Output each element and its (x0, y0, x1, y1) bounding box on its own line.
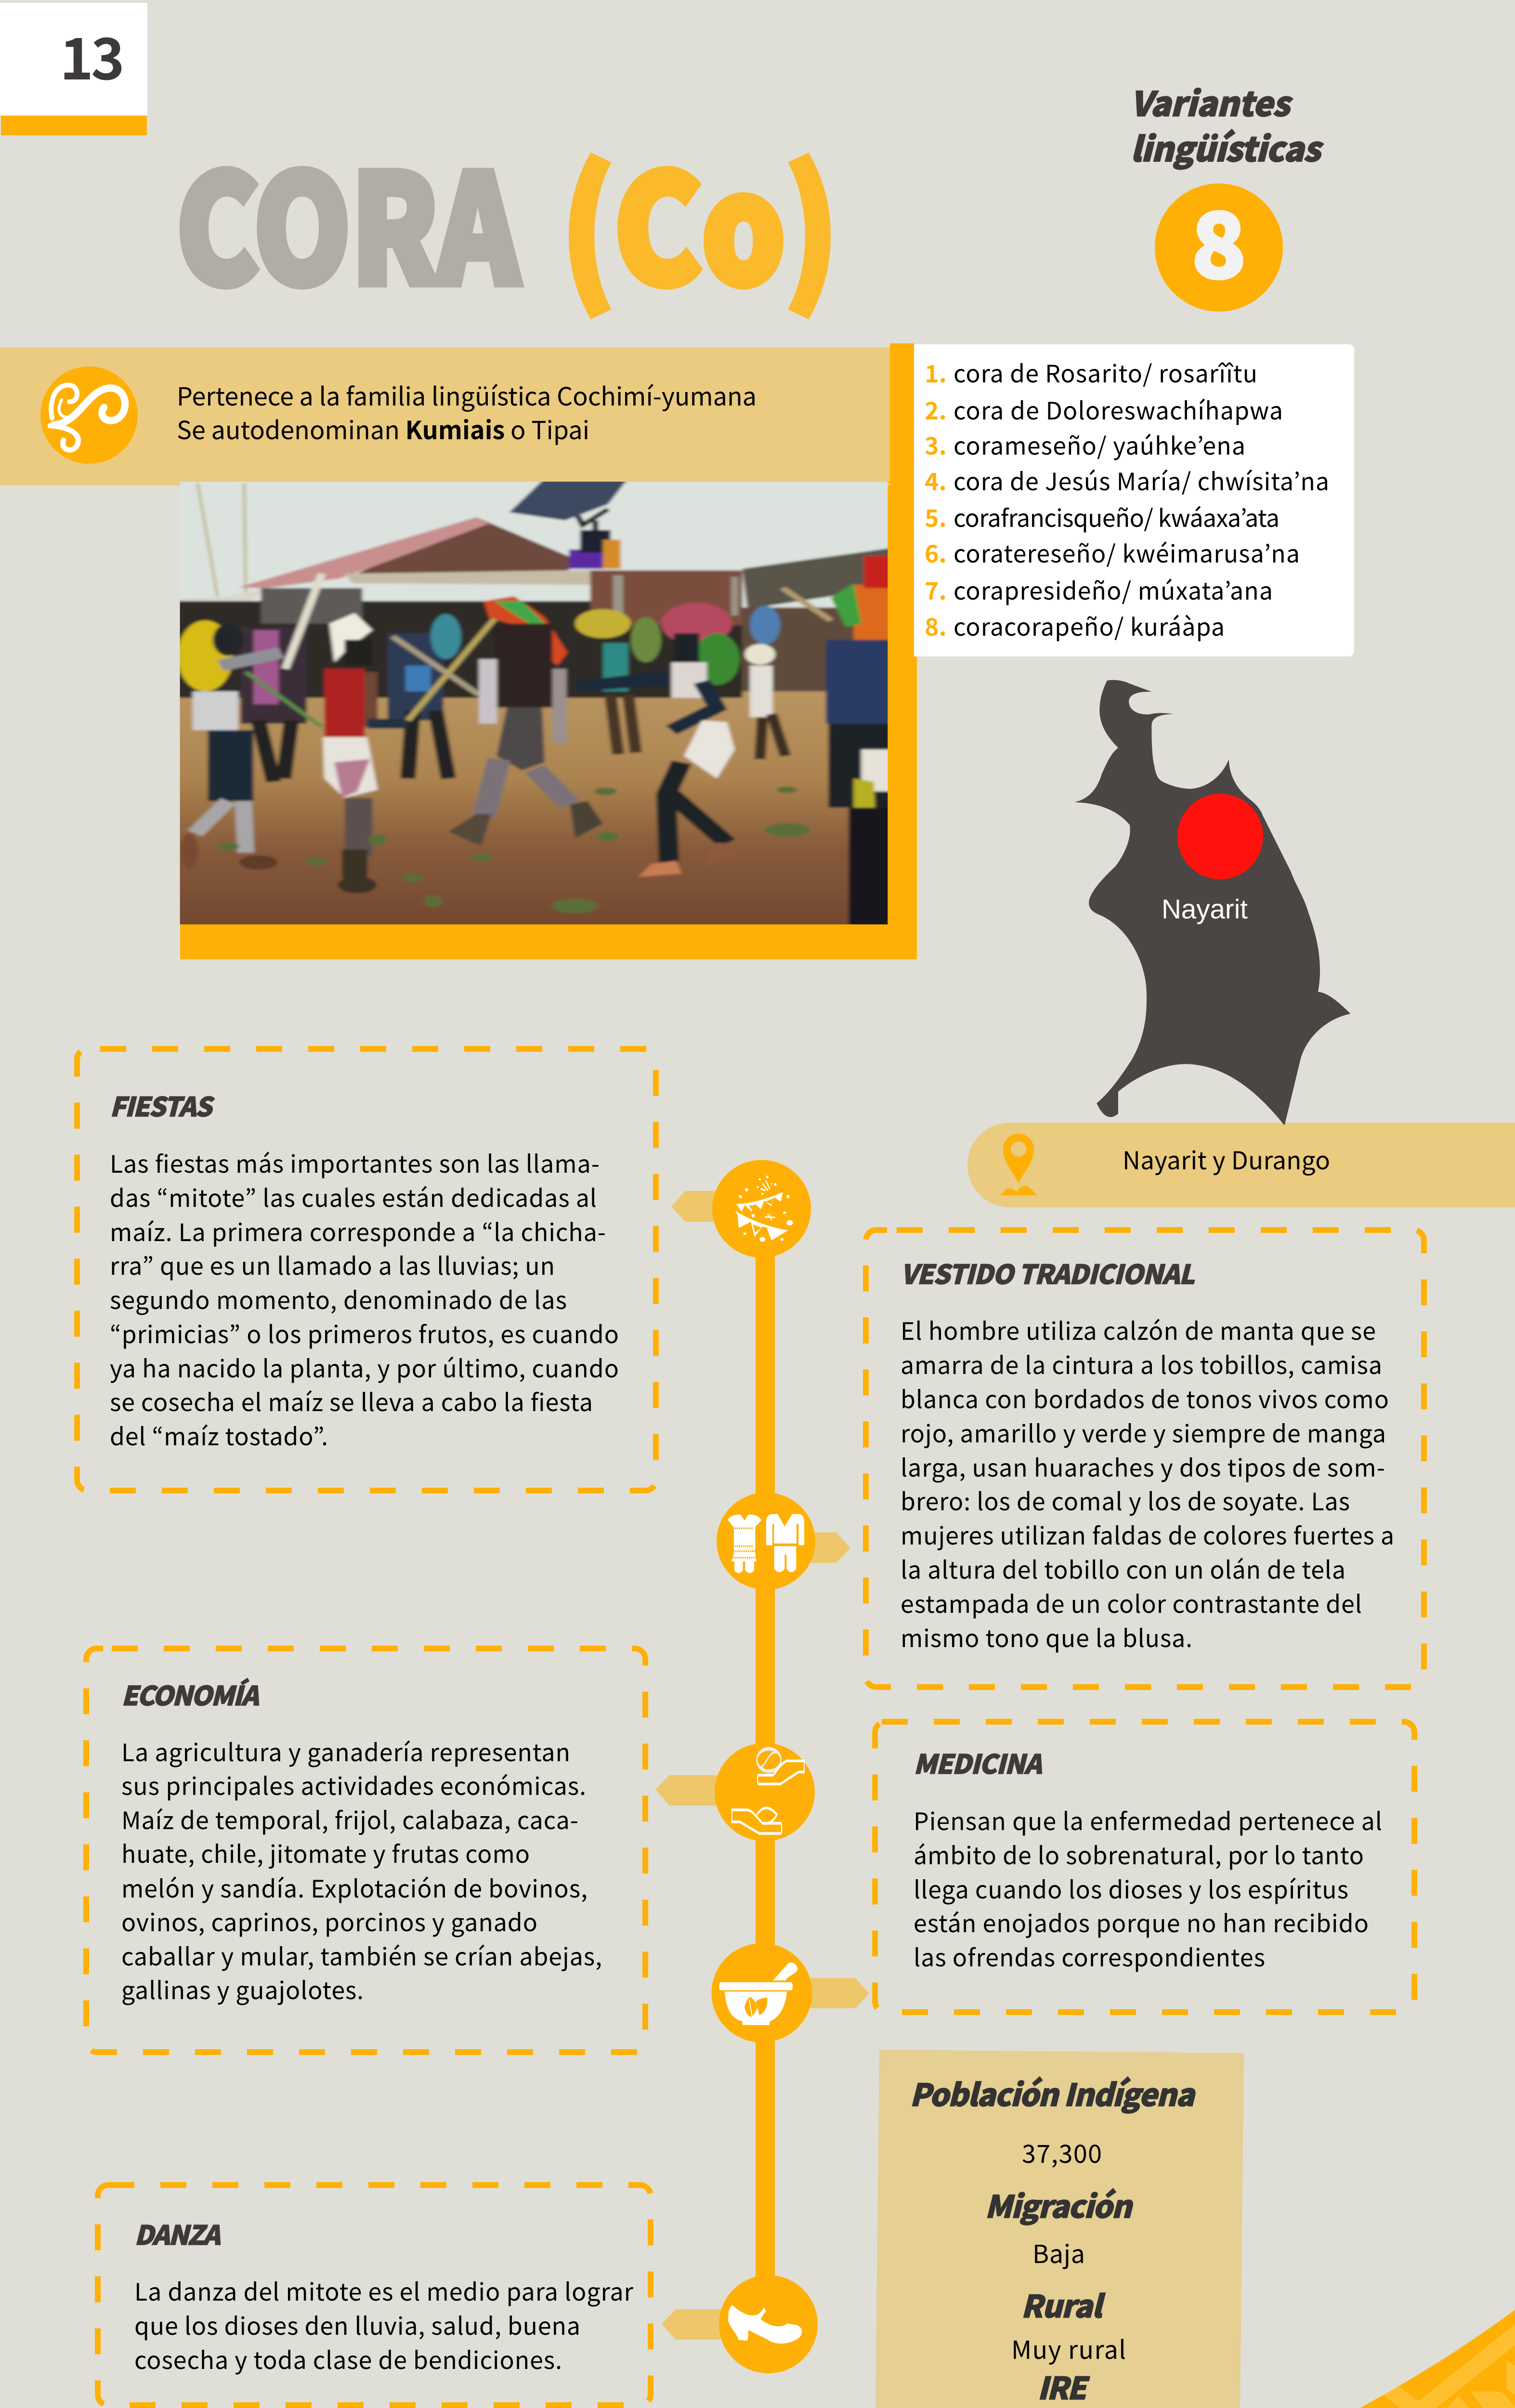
variant 4: cora de Jesús María/ chwísita’na (953, 463, 1329, 497)
body text: las ofrendas correspondientes (914, 1939, 1265, 1974)
body text: La agricultura y ganadería representan (121, 1734, 570, 1768)
variant 6: 6. (925, 535, 947, 570)
node: medicina icon (712, 1943, 812, 2042)
variants count badge (1155, 173, 1283, 312)
grass tufts (217, 786, 810, 913)
rural (1011, 2282, 1126, 2366)
footer woven pattern (6, 2310, 1515, 2408)
body text: mujeres utilizan faldas de colores fuertes a (901, 1517, 1394, 1552)
variant 4: 4. (925, 463, 947, 497)
panel: población (875, 2050, 1244, 2408)
page number tab (0, 3, 147, 135)
body text: das “mitote” las cuales están dedicadas al (110, 1179, 597, 1214)
body text: Las fiestas más importantes son las llama- (110, 1145, 600, 1180)
migración: Baja (1032, 2234, 1085, 2270)
title: CORA (176, 109, 521, 327)
dancer 4 (661, 602, 732, 644)
body text: llega cuando los dioses y los espíritus (914, 1871, 1348, 1906)
dish (509, 478, 628, 520)
body text (110, 1145, 619, 1453)
node: danza icon (719, 2275, 818, 2373)
body text: que los dioses den lluvia, salud, buena (134, 2307, 580, 2342)
poles (197, 483, 246, 614)
arrow: economía (655, 1775, 722, 1806)
body text: brero: los de comal y los de soyate. Las (901, 1483, 1350, 1518)
house (357, 517, 569, 574)
body text: larga, usan huaraches y dos tipos de som- (901, 1449, 1385, 1484)
roof figures (569, 550, 604, 569)
ground (165, 692, 904, 937)
body text: caballar y mular, también se crían abejas, (121, 1938, 602, 1973)
rural: Muy rural (1011, 2330, 1126, 2366)
dancer 2 (329, 613, 372, 662)
body text: gallinas y guajolotes. (121, 1972, 364, 2006)
page number tab: 13 (60, 13, 125, 96)
body text: La danza del mitote es el medio para lograr (134, 2273, 634, 2308)
title: (Co) (562, 109, 838, 327)
location marker (1177, 794, 1263, 879)
migración: Migración (985, 2183, 1134, 2227)
photo: danza del mitote (165, 472, 904, 937)
body text (914, 1803, 1382, 1974)
arrow: medicina (804, 1978, 869, 2008)
variants list panel (914, 344, 1354, 656)
heading: FIESTAS (110, 1086, 215, 1124)
heading: MEDICINA (914, 1743, 1042, 1781)
rural: Rural (1021, 2282, 1106, 2327)
location text: Nayarit y Durango (1123, 1141, 1330, 1177)
body text: segundo momento, denominado de las (110, 1282, 567, 1316)
variant 5: corafrancisqueño/ kwáaxa’ata (953, 499, 1280, 534)
body text: rojo, amarillo y verde y siempre de manga (901, 1415, 1386, 1450)
body text: estampada de un color contrastante del (901, 1585, 1362, 1620)
body text: la altura del tobillo con un olán de tela (901, 1551, 1345, 1586)
background dancers (603, 643, 628, 692)
body text (121, 1734, 602, 2006)
body text: huate, chile, jitomate y frutas como (121, 1835, 530, 1870)
población indígena (910, 2071, 1196, 2170)
body text: ámbito de lo sobrenatural, por lo tanto (914, 1837, 1364, 1871)
node: vestido icon (717, 1492, 815, 1590)
body text: sus principales actividades económicas. (121, 1767, 586, 1802)
body text: amarra de la cintura a los tobillos, camisa (901, 1347, 1382, 1381)
variant 7: 7. (925, 572, 947, 607)
body text: están enojados porque no han recibido (914, 1905, 1369, 1939)
variant 3: corameseño/ yaúhke’ena (953, 427, 1245, 462)
body text: blanca con bordados de tonos vivos como (901, 1381, 1389, 1415)
heading: DANZA (134, 2214, 221, 2252)
variant 7: corapresideño/ múxata’ana (953, 572, 1273, 607)
body text: ya ha nacido la planta, y por último, cuando (110, 1350, 619, 1385)
body text: Maíz de temporal, frijol, calabaza, caca- (121, 1802, 578, 1836)
variants heading: lingüísticas (1130, 123, 1324, 171)
photo frame (180, 343, 917, 959)
body text: se cosecha el maíz se lleva a cabo la fiesta (110, 1384, 593, 1418)
variants heading (1130, 78, 1324, 171)
family text: Se autodenominan Kumiais o Tipai (177, 410, 589, 446)
heading: VESTIDO TRADICIONAL (901, 1253, 1195, 1292)
variants heading: Variantes (1130, 78, 1293, 126)
panel: danza (98, 2185, 651, 2405)
body text: mismo tono que la blusa. (901, 1620, 1192, 1654)
variant 5: 5. (925, 499, 947, 534)
map label: Nayarit (1162, 894, 1248, 924)
icon: swirl (40, 366, 138, 464)
language family band (0, 347, 890, 485)
body text: rra” que es un llamado a las lluvias; un (110, 1247, 555, 1282)
arrow: vestido (804, 1532, 850, 1563)
variants count badge: 8 (1191, 173, 1246, 304)
arrow: danza (662, 2309, 727, 2340)
variant 8: coracorapeño/ kuráàpa (953, 608, 1225, 643)
timeline spine (756, 1209, 775, 2324)
variant 2: 2. (925, 392, 947, 427)
body text: maíz. La primera corresponde a “la chicha- (110, 1214, 606, 1248)
family text (177, 377, 757, 446)
body text: melón y sandía. Explotación de bovinos, (121, 1870, 588, 1905)
variant 6: coratereseño/ kwéimarusa’na (953, 535, 1300, 570)
sky (180, 482, 888, 610)
panel: medicina (875, 1722, 1414, 2012)
dancer right (854, 585, 904, 692)
body text: Piensan que la enfermedad pertenece al (914, 1803, 1382, 1837)
población indígena: Población Indígena (910, 2071, 1196, 2115)
dancer 1 (177, 620, 233, 692)
node: fiestas icon (712, 1160, 811, 1258)
back crowd (241, 627, 307, 724)
body text (134, 2273, 634, 2376)
población indígena: 37,300 (1022, 2134, 1102, 2170)
variant 2: cora de Doloreswachíhapwa (953, 392, 1283, 427)
body text: ovinos, caprinos, porcinos y ganado (121, 1904, 537, 1938)
map of Nayarit (1074, 680, 1351, 1125)
variant 1: 1. (925, 355, 947, 390)
panel: fiestas (77, 1049, 656, 1491)
arrow: fiestas (671, 1191, 722, 1222)
panel: economía (86, 1649, 645, 2052)
variant 1: cora de Rosarito/ rosarîîtu (953, 355, 1257, 390)
migración (985, 2183, 1134, 2270)
location pill (967, 1123, 1515, 1207)
icon: map pin (1000, 1134, 1037, 1195)
variant 8: 8. (925, 608, 947, 643)
body text: del “maíz tostado”. (110, 1418, 328, 1453)
body text: “primicias” o los primeros frutos, es cuando (110, 1316, 619, 1350)
title (176, 109, 838, 327)
heading: ECONOMÍA (121, 1675, 259, 1713)
body text: cosecha y toda clase de bendiciones. (134, 2342, 562, 2376)
IRE: IRE (1037, 2364, 1090, 2408)
panel: vestido tradicional (866, 1230, 1424, 1687)
variant 3: 3. (925, 427, 947, 462)
dancer 3 (484, 596, 567, 666)
body text (901, 1312, 1394, 1654)
family text: Pertenece a la familia lingüística Cochimí-yumana (177, 377, 757, 413)
node: economía icon (715, 1743, 815, 1841)
body text: El hombre utiliza calzón de manta que se (901, 1312, 1376, 1347)
